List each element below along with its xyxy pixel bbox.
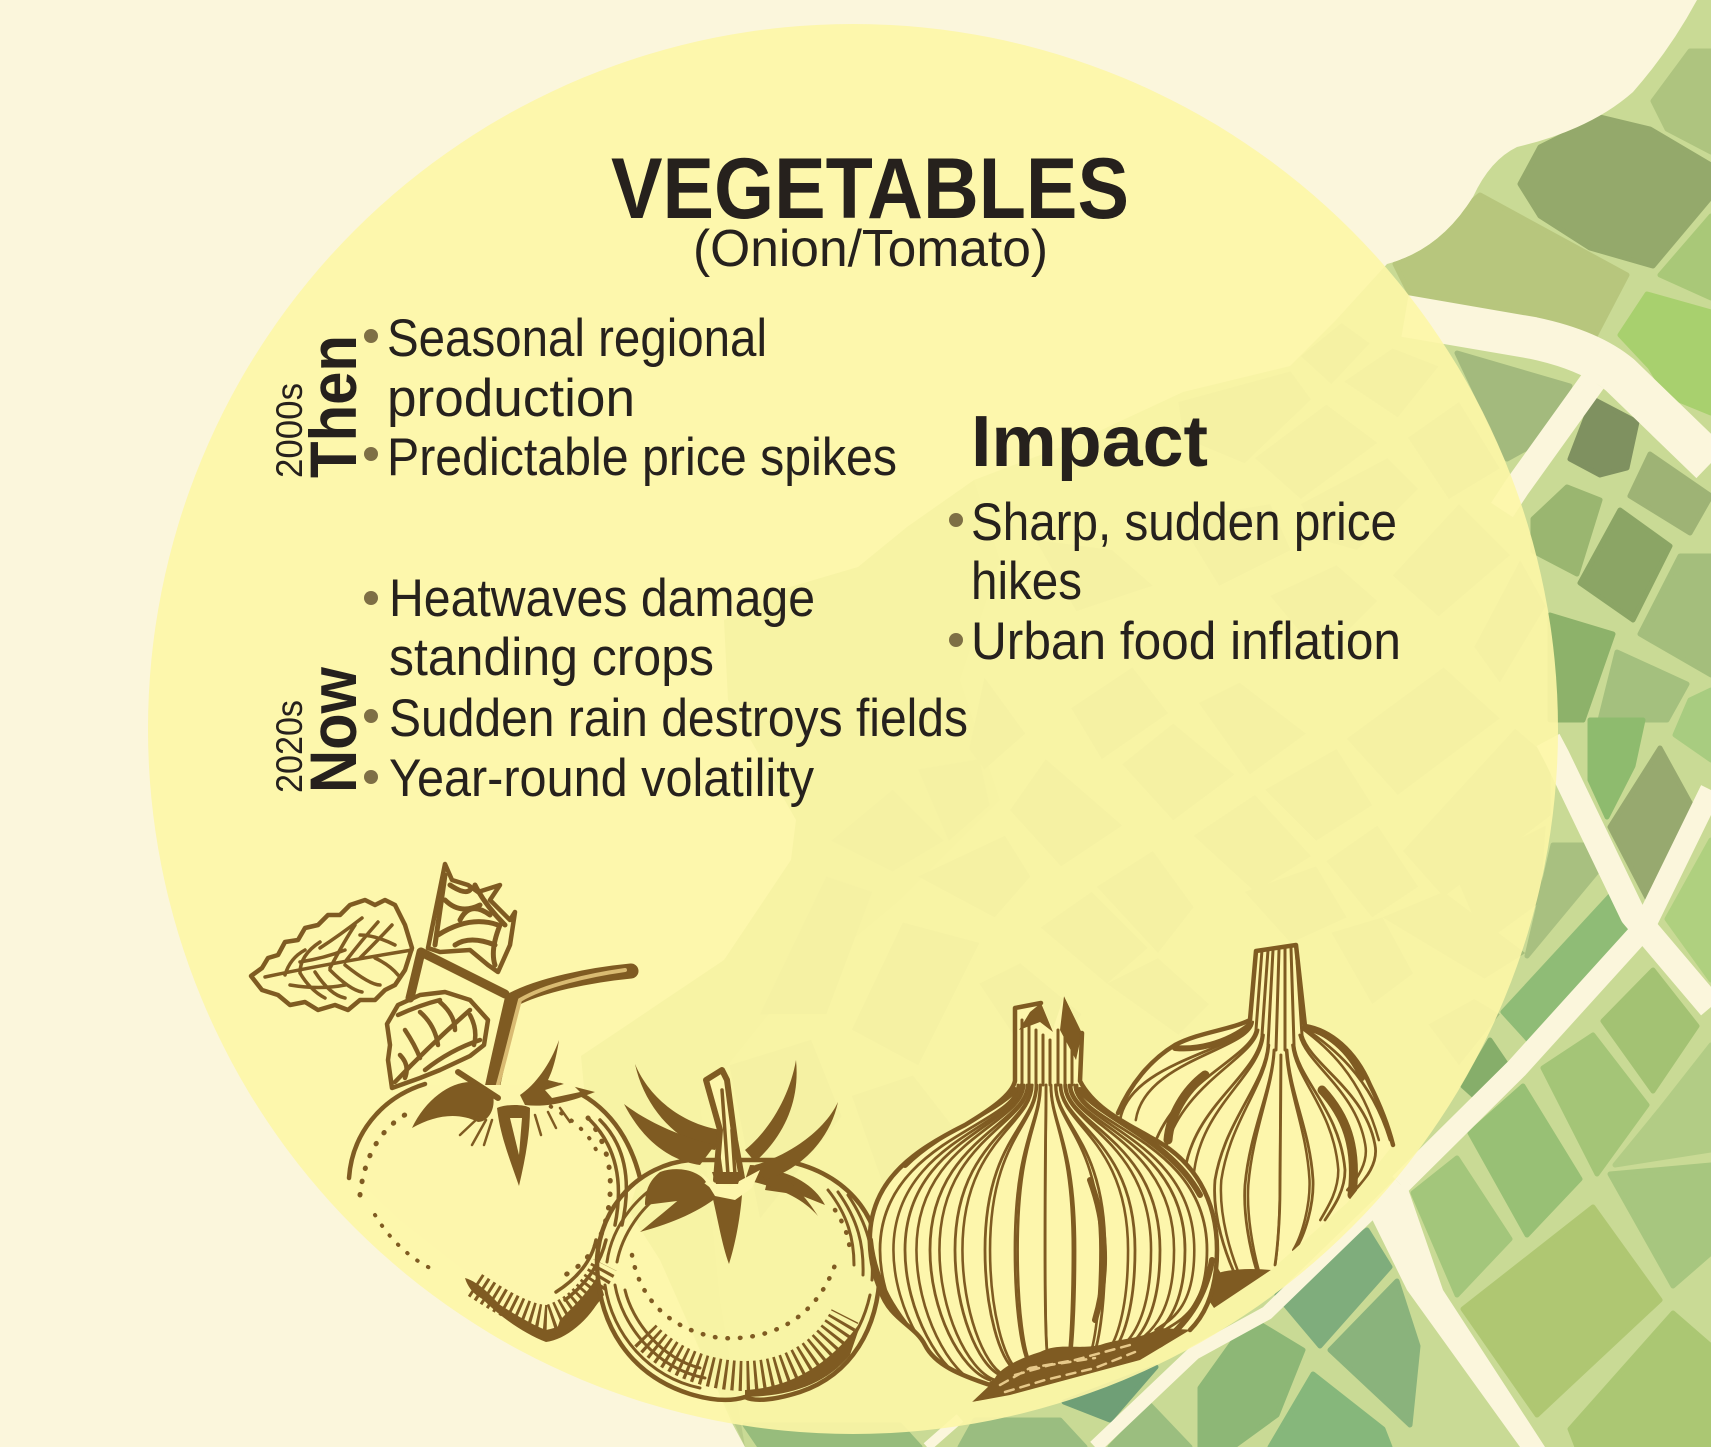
illustration: left tomato: [349, 1040, 640, 1342]
label: Then 2000s: [269, 335, 370, 478]
illustration: back onion: [1118, 945, 1393, 1310]
text block: then list: production: [387, 369, 635, 428]
text block: then list: Predictable price spikes: [387, 428, 897, 487]
text block: now list: standing crops: [389, 628, 714, 687]
label: Now 2020s: [269, 666, 370, 793]
heading: VEGETABLES: VEGETABLES: [611, 141, 1129, 237]
text block: then list: Seasonal regional: [387, 309, 767, 368]
label: Now 2020s: Now: [296, 666, 370, 793]
field map: green watercolor farmland: [730, 0, 1711, 1447]
text block: impact list: Urban food inflation: [971, 612, 1401, 671]
text block: now list: Heatwaves damage: [389, 569, 815, 628]
illustration: tomato vine with leaves: [251, 864, 631, 1098]
text block: now list: Sudden rain destroys fields: [389, 689, 968, 748]
label: Now 2020s: 2020s: [269, 700, 310, 793]
illustration: front tomato: [597, 1060, 880, 1400]
illustration: front onion: [870, 996, 1217, 1402]
text block: then list: [364, 309, 897, 487]
text block: impact list: [949, 493, 1401, 671]
text block: now list: Year-round volatility: [389, 749, 814, 808]
subheading: Onion/Tomato: (Onion/Tomato): [693, 220, 1048, 278]
label: Then 2000s: Then: [296, 335, 370, 478]
label: Then 2000s: 2000s: [269, 383, 310, 478]
text block: impact list: Sharp, sudden price: [971, 493, 1397, 552]
text block: impact list: hikes: [971, 552, 1082, 611]
heading: Impact: Impact: [971, 402, 1208, 482]
text block: now list: [364, 569, 968, 808]
